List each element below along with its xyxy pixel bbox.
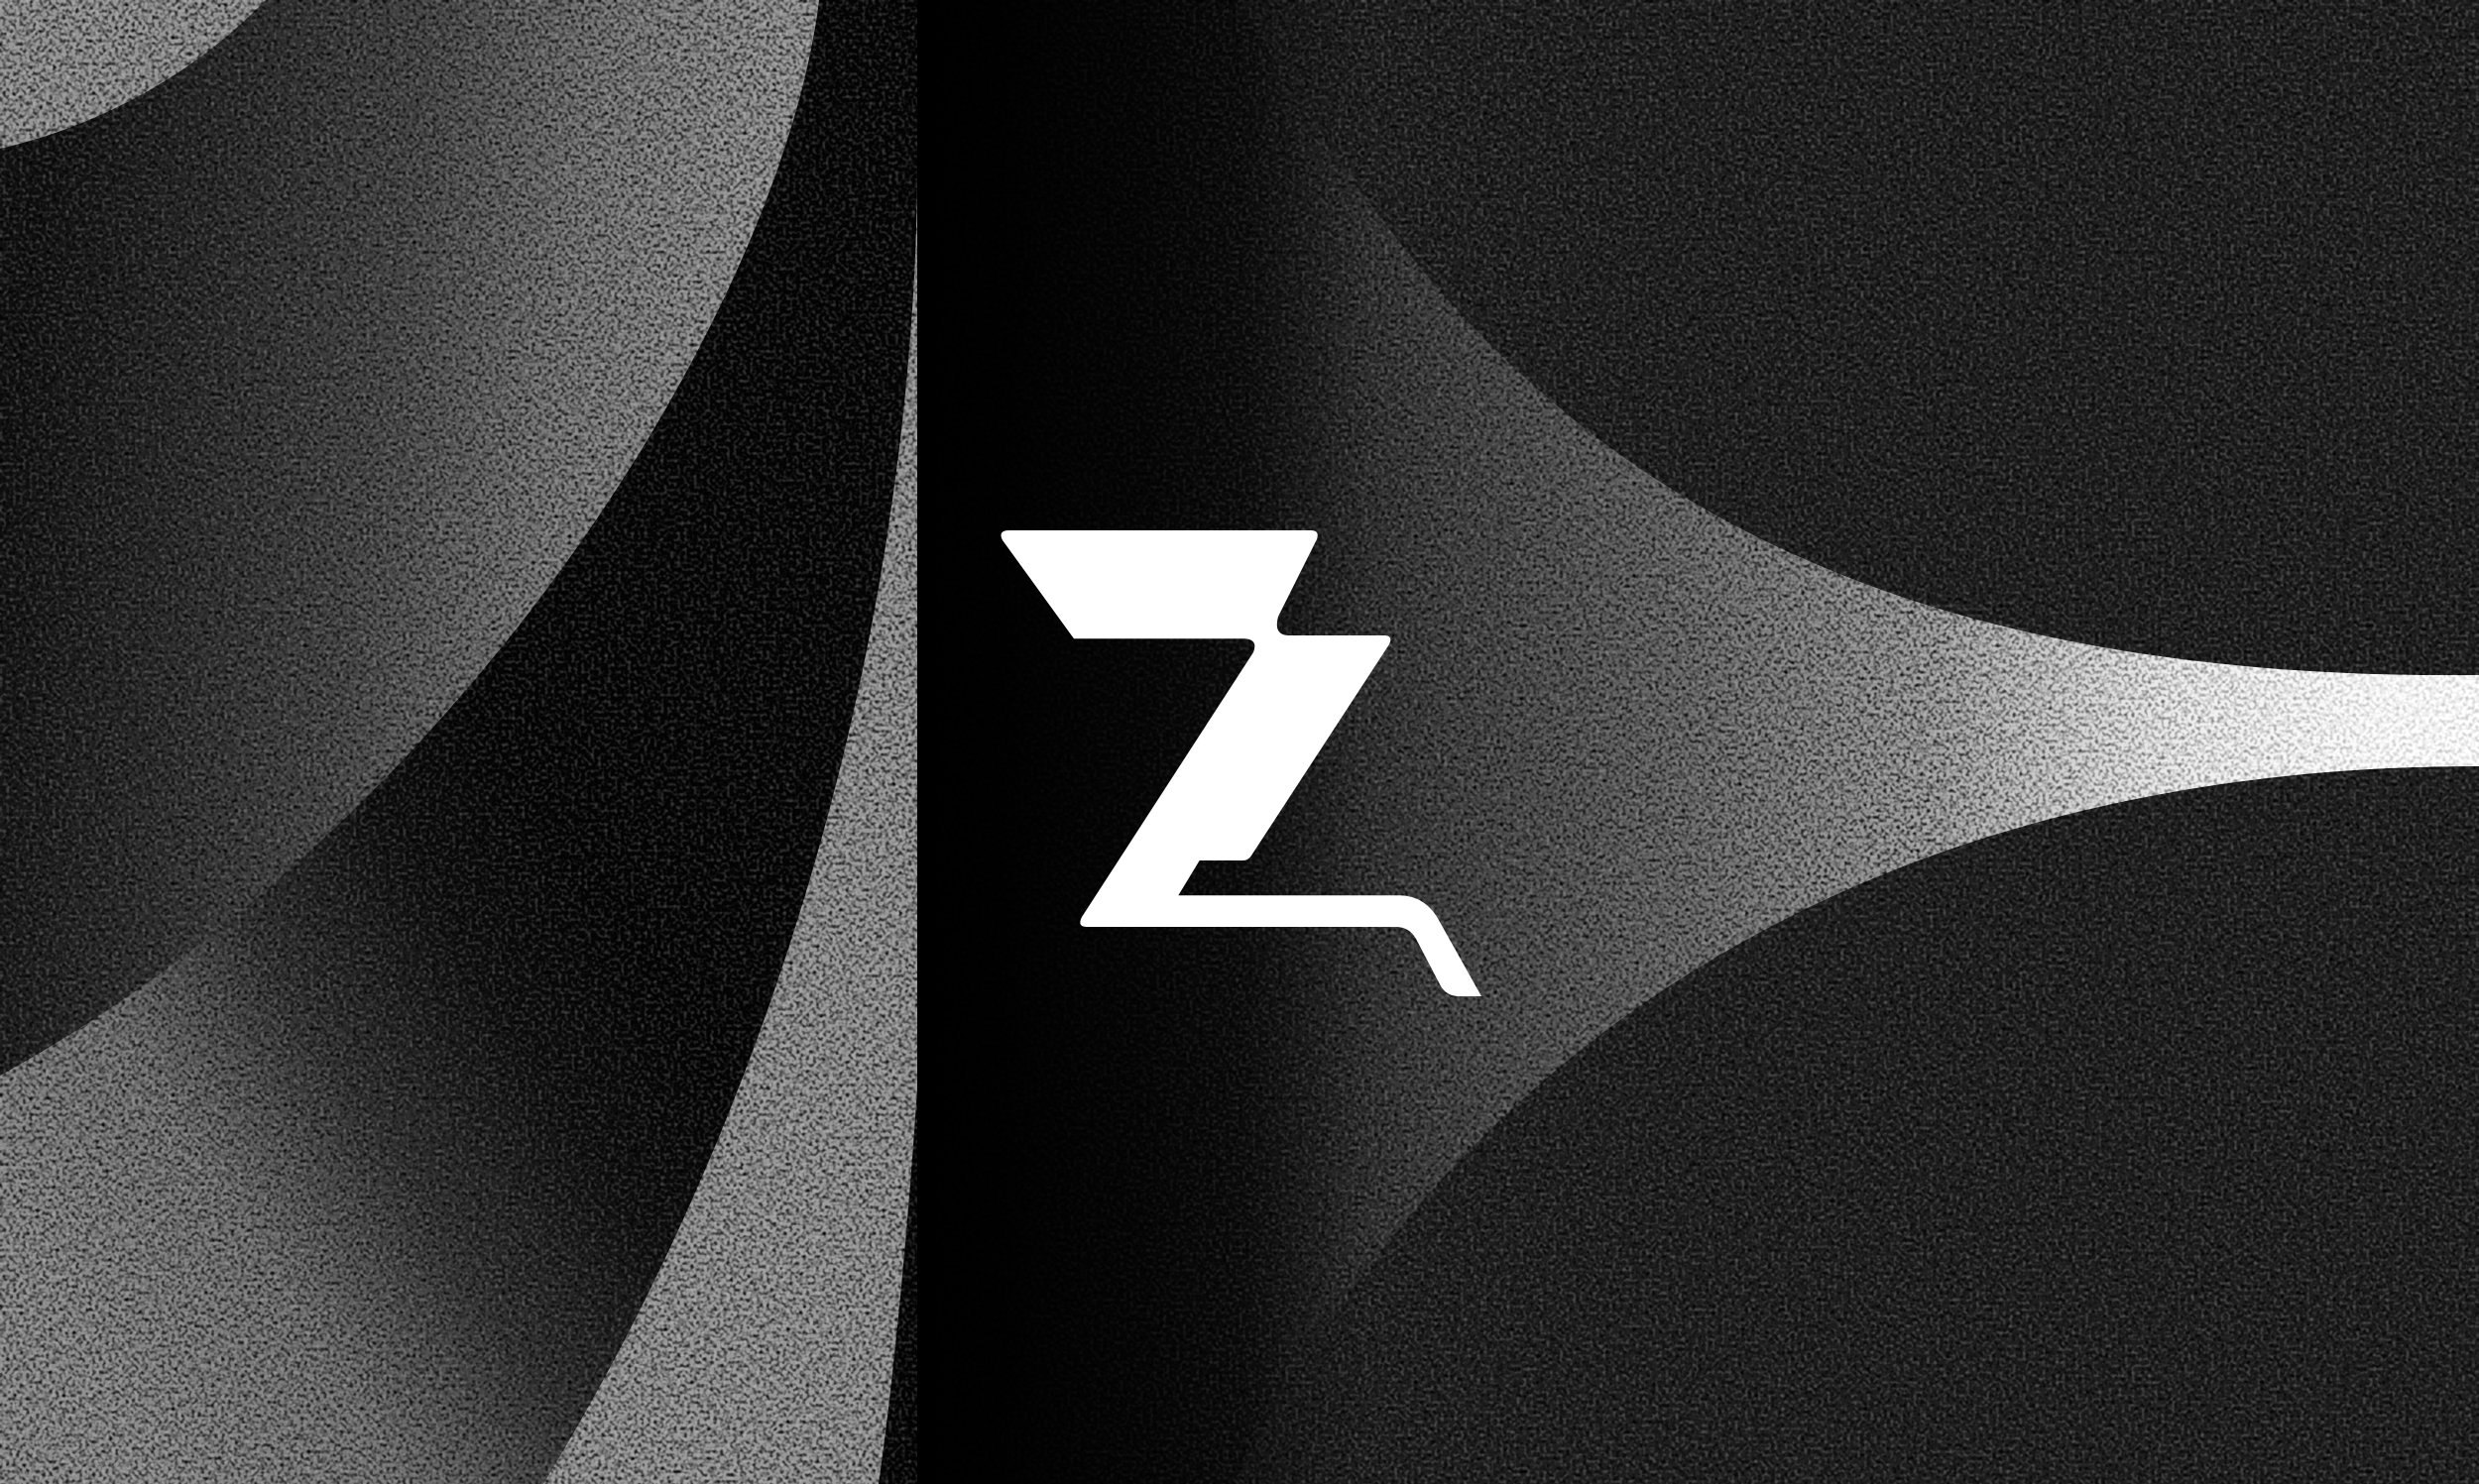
light band beside the outer arc [543,182,917,1484]
top-left corner light arc [0,0,266,149]
dark circles background [917,0,2479,1484]
funnel highlight at the right edge [917,0,2479,1484]
icon: white Z logo [1002,530,1481,996]
black sliver at lower right of the panel [879,1088,917,1484]
panel: right funnel [917,0,2479,1484]
inner arc, dark left fading to grey [0,0,819,1076]
centre black strip [917,0,1373,1484]
light funnel between the two dark circles [917,0,2479,1484]
large arc band, bright lower left fading to black [0,0,917,1484]
panel: left arcs [0,0,917,1484]
